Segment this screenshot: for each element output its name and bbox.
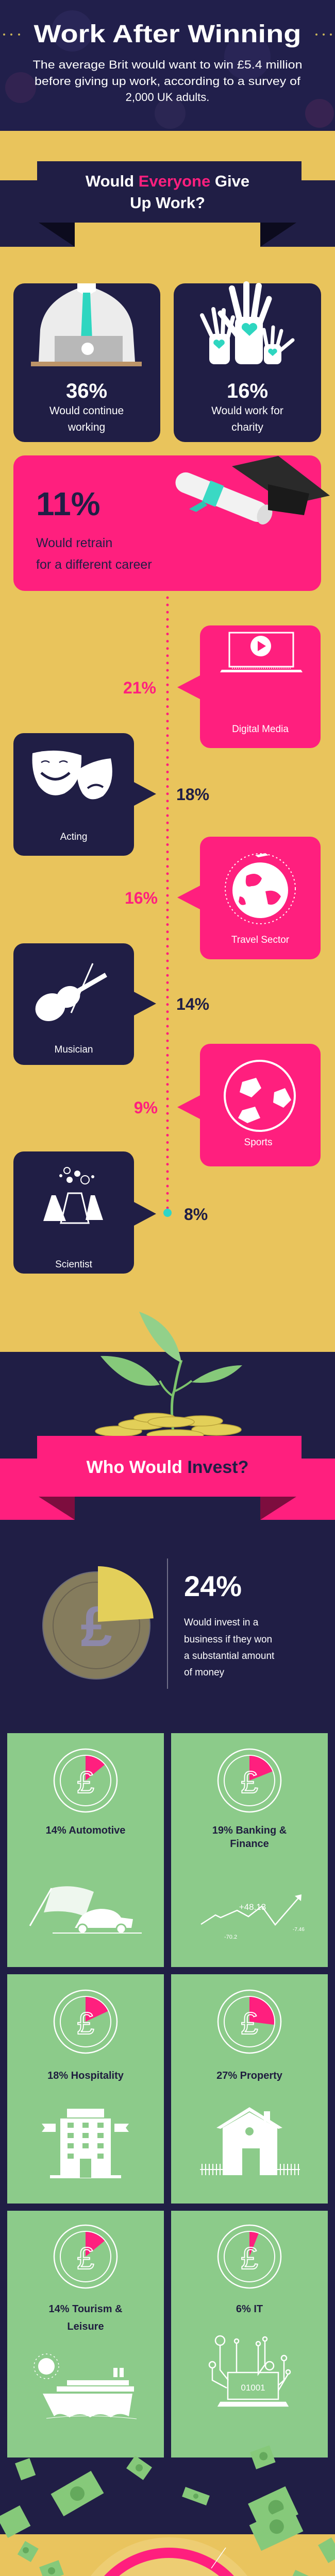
- decorative dots left: [3, 33, 20, 36]
- cell: tourism & leisure: 14% Tourism &: [48, 2303, 123, 2315]
- card: travel sector 16%: 16%: [125, 889, 158, 907]
- card: digital media 21%: 21%: [123, 679, 156, 697]
- ribbon: would everyone give up work: [0, 161, 335, 247]
- icon: globe: [225, 853, 295, 924]
- icon: hands with hearts: [202, 284, 293, 364]
- card: digital media 21%: [123, 625, 321, 748]
- coin chart 24%: [43, 1566, 154, 1679]
- card: sports 9%: [134, 1044, 321, 1166]
- yellow tell section background: [0, 2534, 335, 2576]
- cell: automotive: £: [77, 1765, 94, 1800]
- dotted timeline: [166, 598, 169, 1208]
- panel: 36% continue working: Would continue: [49, 405, 124, 417]
- card: musician 14%: 14%: [176, 995, 209, 1013]
- stat: 24% invest: Would invest in a: [184, 1617, 259, 1628]
- panel: 36% continue working: working: [68, 421, 105, 433]
- icon: flag and car: [30, 1886, 142, 1934]
- cell: IT: £: [241, 2241, 258, 2276]
- ribbon: would everyone give up work: Would Everyone Give: [86, 172, 249, 190]
- icon: theatre masks: [32, 751, 112, 799]
- card: acting 18%: 18%: [176, 785, 209, 804]
- navy invest section background: [0, 1352, 335, 2535]
- falling banknotes: [15, 2445, 298, 2532]
- stat: 24% invest: 24%: [184, 1570, 242, 1602]
- cell: banking & finance: 19% Banking &: [212, 1825, 287, 1836]
- card: musician 14%: [13, 943, 209, 1065]
- cell: banking & finance: [171, 1733, 328, 1967]
- panel: 16% charity: [174, 283, 321, 442]
- cell: hospitality: 18% Hospitality: [47, 2070, 124, 2081]
- cell: automotive: 14% Automotive: [46, 1825, 125, 1836]
- subtitle: 2,000 UK adults.: [126, 91, 209, 104]
- cell: automotive: [7, 1733, 164, 1967]
- header background: [0, 0, 335, 131]
- icon: laptop with play: [220, 633, 303, 672]
- stat: 24% invest: business if they won: [184, 1634, 272, 1645]
- card: travel sector 16%: [125, 837, 321, 959]
- panel: 11% retrain: Would retrain: [36, 536, 112, 550]
- cell: IT: 6% IT: [236, 2303, 263, 2315]
- card: scientist 8%: 8%: [184, 1205, 208, 1224]
- icon: circuit laptop: [209, 2336, 290, 2406]
- cell: IT: [171, 2211, 328, 2458]
- cell: IT: 01001: [241, 2383, 265, 2393]
- icon: graduation cap: [232, 456, 330, 515]
- stat: 24% invest: a substantial amount: [184, 1651, 275, 1662]
- icon: house: [200, 2107, 300, 2175]
- cell: hospitality: [7, 1974, 164, 2204]
- subtitle: The average Brit would want to win £5.4 million: [33, 58, 302, 71]
- icon: plant with coins: [95, 1312, 242, 1440]
- banknotes over yellow: [0, 2505, 335, 2576]
- decorative dots right: [315, 33, 332, 36]
- icon: stock chart: -70.2: [224, 1934, 237, 1940]
- coin chart 24%: £: [80, 1595, 112, 1658]
- card: travel sector 16%: Travel Sector: [231, 935, 290, 945]
- icon: violin: [30, 963, 113, 1027]
- icon: flasks: [43, 1167, 103, 1223]
- subtitle: before giving up work, according to a survey of: [35, 75, 301, 88]
- cell: banking & finance: Finance: [230, 1838, 269, 1850]
- cell: property: [171, 1974, 328, 2204]
- panel: 11% retrain: [13, 455, 330, 591]
- card: sports 9%: Sports: [244, 1137, 272, 1148]
- cell: banking & finance: £: [241, 1765, 258, 1800]
- card: sports 9%: 9%: [134, 1098, 158, 1117]
- panel: 16% charity: charity: [231, 421, 263, 433]
- cell: tourism & leisure: [7, 2211, 164, 2458]
- divider: [167, 1558, 168, 1689]
- subtitle: [33, 58, 302, 104]
- icon: sun and cruise ship: [34, 2354, 137, 2419]
- icon: diploma: [167, 468, 276, 539]
- panel: 11% retrain: 11%: [36, 485, 100, 522]
- ribbon: would everyone give up work: Up Work?: [130, 194, 205, 212]
- panel: 16% charity: 16%: [227, 380, 268, 402]
- card: acting 18%: [13, 733, 209, 856]
- card: musician 14%: Musician: [55, 1044, 93, 1055]
- stat: 24% invest: [184, 1570, 275, 1678]
- card: acting 18%: Acting: [60, 832, 87, 842]
- cell: property: £: [241, 2006, 258, 2041]
- icon: stock chart: +48.13: [239, 1902, 266, 1912]
- card: digital media 21%: Digital Media: [232, 724, 289, 735]
- card: scientist 8%: [13, 1151, 208, 1274]
- timeline end dot: [163, 1209, 172, 1217]
- card: scientist 8%: Scientist: [55, 1259, 93, 1270]
- cell: tourism & leisure: Leisure: [67, 2321, 104, 2332]
- ribbon: who would invest: [0, 1436, 335, 1520]
- icon: football: [225, 1061, 295, 1131]
- icon: hotel: [42, 2109, 129, 2178]
- panel: 11% retrain: for a different career: [36, 557, 152, 572]
- icon: stock chart: -7.46: [293, 1927, 305, 1933]
- panel: 36% continue working: [13, 283, 160, 442]
- panel: 16% charity: Would work for: [211, 405, 283, 417]
- yellow section background: [0, 131, 335, 1352]
- title: Work After Winning: [34, 21, 301, 48]
- icon: man at laptop: [31, 283, 142, 366]
- stat: 24% invest: of money: [184, 1667, 225, 1678]
- cell: property: 27% Property: [216, 2070, 283, 2081]
- panel: 36% continue working: 36%: [66, 380, 107, 402]
- icon: stock chart: [201, 1894, 305, 1940]
- ribbon: who would invest: Who Would Invest?: [87, 1458, 248, 1477]
- cell: hospitality: £: [77, 2006, 94, 2041]
- cell: tourism & leisure: £: [77, 2241, 94, 2276]
- icon: no megaphone: [70, 2537, 268, 2576]
